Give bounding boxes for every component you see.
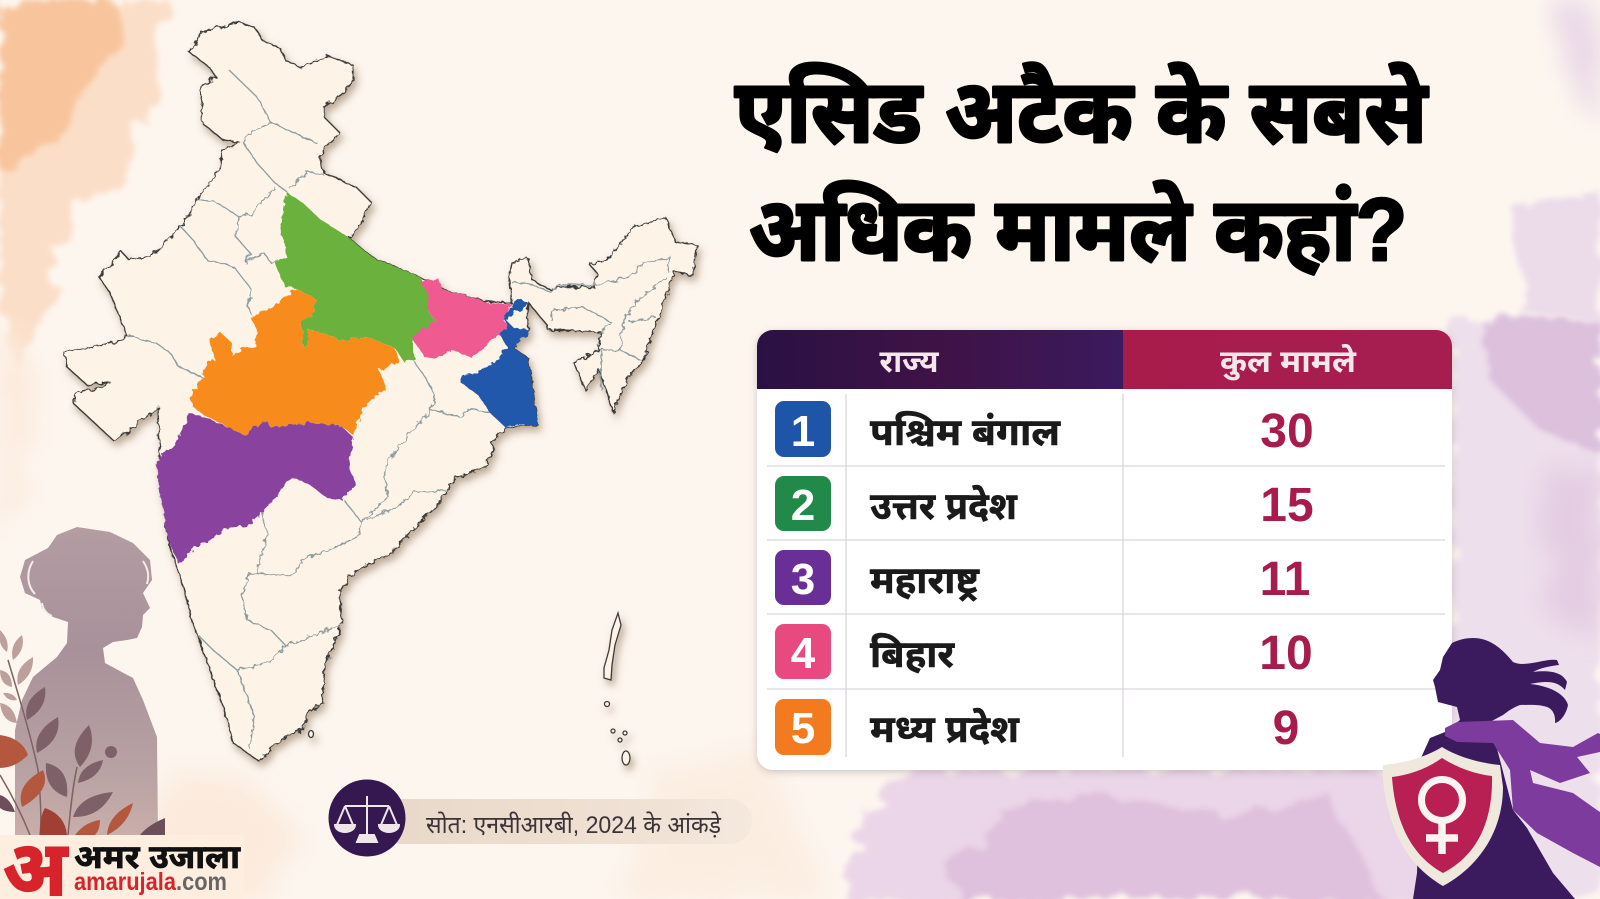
logo: Amar Ujala: अमर उजाला: [74, 838, 241, 875]
header text: [879, 344, 1357, 381]
table panel: [757, 330, 1452, 770]
row 1: West Bengal: पश्चिम बंगाल: [870, 410, 1061, 454]
row 2: Uttar Pradesh: 15: [1260, 479, 1314, 532]
row 2: Uttar Pradesh: [775, 476, 1314, 532]
table header: state: [757, 330, 1123, 389]
map of India: [64, 22, 697, 765]
title: [735, 62, 1429, 279]
row 3: Maharashtra: [775, 550, 1310, 606]
row 4: Bihar: 4: [791, 629, 816, 678]
hair highlights: [28, 561, 148, 616]
watercolor: orange top-left: [0, 0, 170, 540]
row 1: West Bengal: 1: [791, 407, 815, 456]
map: state borders: [126, 70, 670, 749]
watercolor: purple bottom: [845, 768, 1460, 899]
row 3: Maharashtra: 3: [791, 555, 815, 604]
map: Uttar Pradesh (green): [275, 192, 435, 362]
row 5: Madhya Pradesh: मध्य प्रदेश: [870, 707, 1020, 751]
body and hair: [1413, 638, 1575, 899]
botanical leaves left: [0, 630, 165, 835]
scarf: [1445, 720, 1600, 867]
source pill: [380, 799, 752, 844]
logo: Amar Ujala: amarujala.com: [74, 868, 227, 896]
row 3: Maharashtra: महाराष्ट्र: [870, 560, 980, 602]
icon: scales of justice: [328, 780, 406, 856]
header text: राज्य: [879, 344, 940, 379]
row 4: Bihar: [775, 624, 1313, 680]
watercolor: purple right side: [1440, 0, 1600, 899]
silhouette: woman with scarf: [1413, 638, 1600, 899]
row 5: Madhya Pradesh: 5: [791, 704, 815, 753]
title: अधिक मामले कहां?: [749, 180, 1407, 279]
row 3: Maharashtra: 11: [1260, 553, 1310, 606]
row 4: Bihar: 10: [1259, 627, 1313, 680]
source pill: सोत: एनसीआरबी, 2024 के आंकड़े: [426, 811, 722, 839]
title: एसिड अटैक के सबसे: [735, 62, 1429, 161]
map: Andaman and Lakshadweep islands: [308, 613, 630, 765]
icon: shield with female symbol: [1383, 747, 1503, 886]
silhouette: woman left: [15, 527, 158, 835]
watercolor: peach leaves bottom centre: [130, 750, 830, 899]
header text: कुल मामले: [1220, 344, 1357, 381]
table header: total cases: [1123, 330, 1452, 389]
row 2: Uttar Pradesh: उत्तर प्रदेश: [870, 484, 1018, 528]
logo: Amar Ujala: [0, 827, 244, 899]
table grid lines: [767, 394, 1445, 757]
map: West Bengal (blue): [460, 299, 538, 427]
row 1: West Bengal: 30: [1260, 405, 1314, 458]
map: Bihar (pink): [412, 278, 512, 358]
row 2: Uttar Pradesh: 2: [791, 481, 815, 530]
map: base landmass: [64, 22, 697, 761]
row 4: Bihar: बिहार: [870, 632, 955, 676]
row 5: Madhya Pradesh: 9: [1273, 702, 1299, 755]
row 1: West Bengal: [775, 401, 1314, 458]
row 5: Madhya Pradesh: [775, 699, 1299, 755]
map: Maharashtra (purple): [156, 413, 356, 565]
map: Madhya Pradesh (orange): [190, 288, 399, 435]
